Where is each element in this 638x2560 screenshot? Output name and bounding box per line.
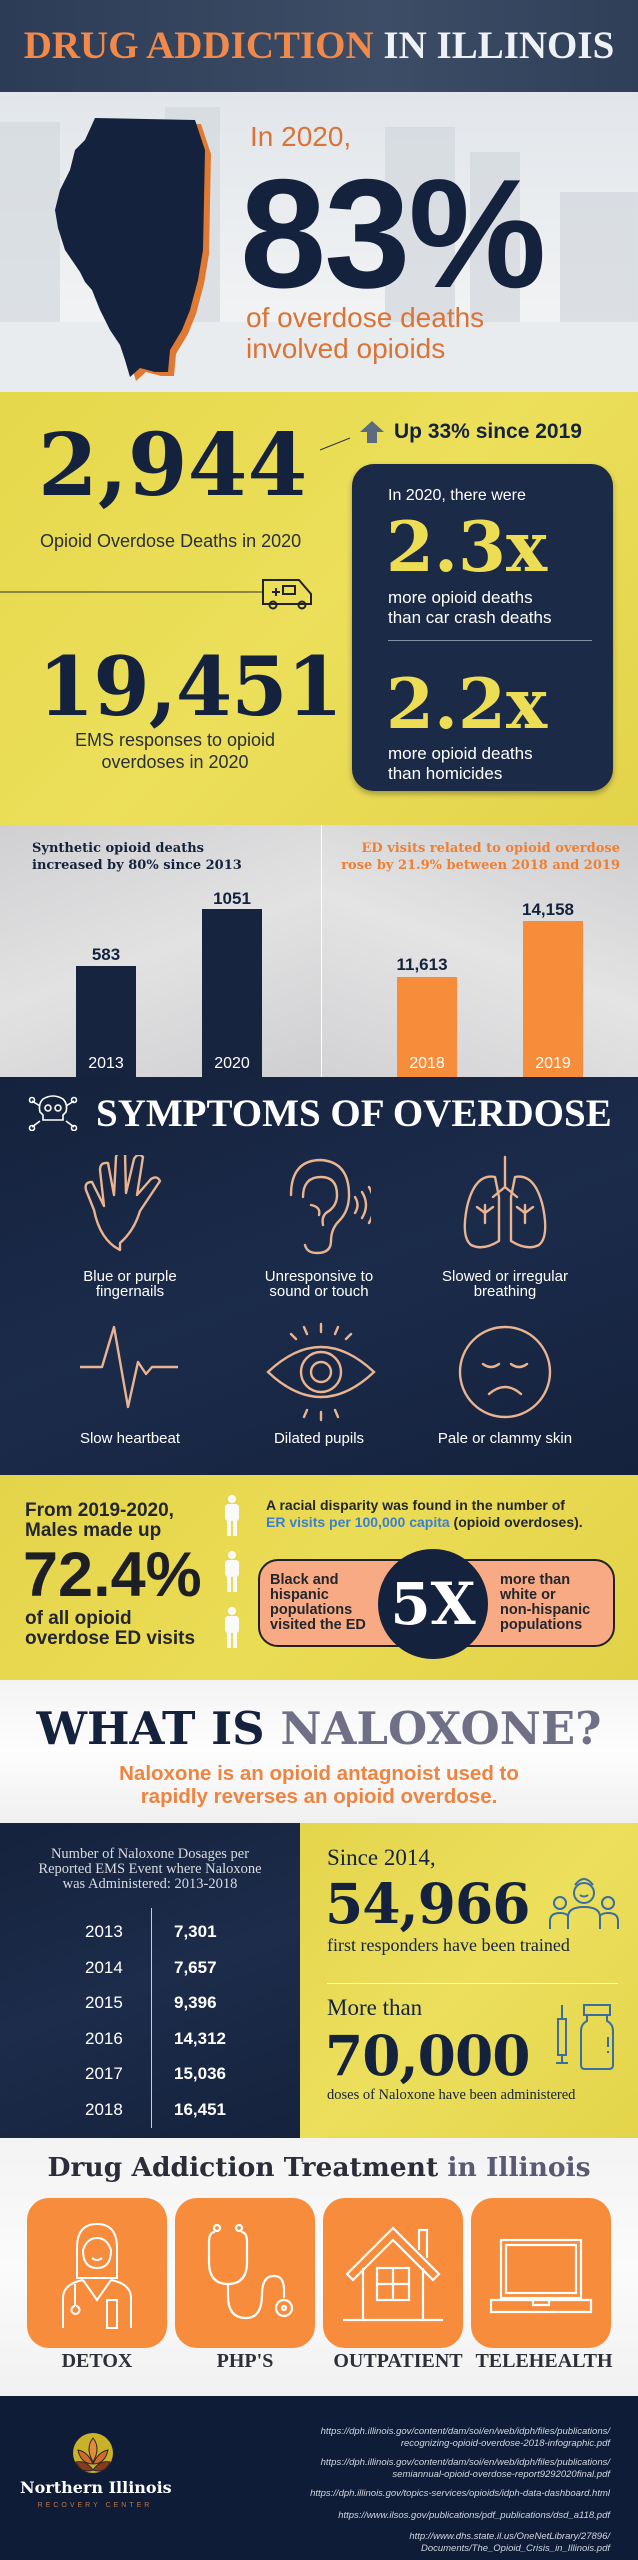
badge: 5X	[378, 1549, 488, 1659]
stat 2,944: 2,944	[38, 415, 307, 516]
panel: hero 83%	[0, 92, 638, 392]
text: car crash: more opioid deaths	[388, 588, 533, 607]
icon: skull	[28, 1095, 78, 1131]
big stat 72.4%: 72.4%	[23, 1540, 202, 1610]
panel: comparison box	[352, 464, 613, 791]
text: definition: rapidly reverses an opioid overdose.	[141, 1785, 497, 1808]
text: from 2019-2020: From 2019-2020,	[25, 1500, 174, 1521]
panel: naloxone dosage table: 2014	[85, 1958, 123, 1977]
label: EMS responses: overdoses in 2020	[101, 752, 249, 772]
symptom: dilated pupils: Dilated pupils	[274, 1430, 364, 1447]
connector line	[320, 438, 350, 450]
callout: 5X box: Black and	[270, 1572, 338, 1588]
callout: 5X box: white or	[500, 1587, 556, 1603]
logo: Northern Illinois	[20, 2478, 172, 2497]
heading: Drug Addiction Treatment in Illinois	[47, 2152, 591, 2183]
panel: treatment	[0, 2138, 638, 2396]
tile: detox	[27, 2198, 167, 2348]
tile: php	[175, 2198, 315, 2348]
text: of overdose deaths: involved opioids	[246, 333, 445, 364]
symptom: breathing: Slowed or irregular	[442, 1268, 568, 1285]
logo	[20, 2433, 172, 2509]
icon: syringe and vial	[556, 2004, 614, 2070]
icon: male figures	[225, 1495, 239, 1648]
symptom: slow heartbeat: Slow heartbeat	[80, 1430, 180, 1447]
icon: responders	[549, 1878, 619, 1929]
bar chart	[396, 900, 583, 1077]
panel: naloxone dosage table: 2016	[85, 2029, 123, 2048]
sources: https://dph.illinois.gov/content/dam/soi/en/web/idph/files/publications/	[321, 2426, 610, 2437]
text: of all opioid: of all opioid	[25, 1608, 132, 1629]
panel: naloxone dosage table: 2015	[85, 1993, 123, 2012]
panel: naloxone dosage table: 7,657	[174, 1958, 217, 1977]
text: of overdose deaths	[246, 302, 484, 364]
panel: male / racial disparity	[0, 1475, 638, 1680]
symptom: fingernails: Blue or purple	[83, 1268, 177, 1285]
text: up 33%: Up 33% since 2019	[394, 420, 582, 443]
panel: naloxone dosage table	[0, 1823, 300, 2138]
icon: ambulance	[263, 580, 311, 608]
bar chart: 1051	[213, 889, 251, 908]
tile: outpatient	[323, 2198, 463, 2348]
panel: ED visits chart	[322, 825, 638, 1077]
footer	[0, 2396, 638, 2560]
text: from 2019-2020	[25, 1500, 174, 1541]
symptom: dilated pupils	[266, 1322, 376, 1447]
logo: RECOVERY CENTER	[38, 2502, 152, 2509]
text: definition: Naloxone is an opioid antagnoist used to	[119, 1762, 519, 1785]
text: racial disparity: ER visits per 100,000 capita (opioid overdoses).	[266, 1514, 583, 1530]
panel: naloxone dosage table: 2018	[85, 2100, 123, 2119]
bar chart: 11,613	[396, 955, 448, 974]
tile labels: TELEHEALTH	[475, 2350, 613, 2372]
chart title: ED visits related to opioid overdose	[361, 841, 620, 856]
table title: was Administered: 2013-2018	[63, 1876, 237, 1892]
chart title: rose by 21.9% between 2018 and 2019	[341, 858, 620, 873]
title: DRUG ADDICTION IN ILLINOIS	[24, 24, 614, 67]
icon: up arrow	[360, 421, 384, 443]
symptom: slow heartbeat	[80, 1326, 180, 1447]
panel: naloxone dosage table: 2013	[85, 1922, 123, 1941]
panel: naloxone dosage table: 16,451	[174, 2100, 226, 2119]
sources: semiannual-opioid-overdose-report9292020final.pdf https://dph.illinois.gov/topics-services/opioids/idph-data-dashboard.html https://www.ilsos.gov/publications/pdf_publications/dsd_a118.pdf http://www.dhs.state.il.us/OneNetLibrary/27896/	[310, 2468, 610, 2542]
bar chart: 583	[92, 945, 120, 964]
symptom: unresponsive	[265, 1158, 373, 1300]
tile: telehealth	[471, 2198, 611, 2348]
table rows	[85, 1922, 226, 2119]
callout: 5X box	[258, 1559, 615, 1647]
panel: naloxone dosage table: 14,312	[174, 2029, 226, 2048]
tile labels	[62, 2350, 613, 2372]
stat 19,451: 19,451	[38, 640, 342, 735]
symptom: breathing	[442, 1156, 568, 1300]
text: homicides: than homicides	[388, 764, 502, 783]
chart title: increased by 80% since 2013	[32, 858, 242, 873]
bar chart: 14,158	[522, 900, 574, 919]
text: of all opioid	[25, 1608, 195, 1649]
sources	[310, 2426, 611, 2554]
text: doses administered: doses of Naloxone have been administered	[327, 2087, 575, 2103]
text: more than: More than	[327, 1995, 422, 2020]
callout: 5X box: populations	[270, 1602, 352, 1618]
callout: 5X box: non-hispanic	[500, 1602, 590, 1618]
table title	[38, 1846, 262, 1892]
symptom: breathing: breathing	[474, 1283, 536, 1300]
text: car crash	[388, 588, 551, 627]
text: first responders: first responders have been trained	[327, 1935, 570, 1955]
panel: naloxone dosage table: 2017	[85, 2064, 123, 2083]
panel: yellow stats	[0, 392, 638, 825]
stat 2.3x: 2.3x	[386, 507, 547, 588]
symptom: pale skin	[438, 1326, 572, 1447]
tile labels: OUTPATIENT	[333, 2350, 463, 2372]
big stat 83%: 83%	[240, 147, 544, 320]
panel: naloxone stats	[300, 1823, 638, 2138]
label: deaths: Opioid Overdose Deaths in 2020	[40, 531, 301, 551]
chart title	[341, 841, 620, 873]
callout: 5X box: visited the ED	[270, 1617, 366, 1633]
text: car crash: than car crash deaths	[388, 608, 551, 627]
icon: Illinois map	[55, 118, 211, 381]
text: since 2014: Since 2014,	[327, 1845, 436, 1870]
stat 2.2x: 2.2x	[386, 664, 547, 745]
stat 54,966: 54,966	[325, 1871, 530, 1936]
tile labels: PHP'S	[217, 2350, 273, 2372]
bar chart: 2018	[409, 1055, 445, 1072]
text: definition	[119, 1762, 519, 1808]
label: EMS responses	[75, 730, 275, 772]
text: from 2019-2020: Males made up	[25, 1520, 161, 1541]
table title: Number of Naloxone Dosages per	[51, 1846, 249, 1862]
bar chart: 2013	[88, 1055, 124, 1072]
panel: what is naloxone	[0, 1680, 638, 1823]
text: of overdose deaths: of overdose deaths	[246, 302, 484, 333]
panel: symptoms of overdose	[0, 1077, 638, 1475]
bar chart	[76, 889, 262, 1077]
callout: 5X box: more than	[500, 1572, 570, 1588]
badge: 5X: 5X	[390, 1570, 476, 1638]
chart title: Synthetic opioid deaths	[32, 841, 204, 856]
symptom: fingernails	[83, 1155, 177, 1300]
panel: naloxone dosage table: 9,396	[174, 1993, 217, 2012]
divider line with ambulance	[0, 579, 312, 610]
text: of all opioid: overdose ED visits	[25, 1628, 195, 1649]
text: homicides: more opioid deaths	[388, 744, 533, 763]
sources: recognizing-opioid-overdose-2018-infographic.pdf https://dph.illinois.gov/content/dam/soi/en/web/idph/files/publications/	[321, 2438, 610, 2468]
heading: SYMPTOMS OF OVERDOSE	[96, 1092, 612, 1135]
text: In 2020: In 2020,	[250, 121, 351, 152]
callout: 5X box: hispanic	[270, 1587, 329, 1603]
label: EMS responses: EMS responses to opioid	[75, 730, 275, 750]
callout: 5X box: populations	[500, 1617, 582, 1633]
sources: Documents/The_Opioid_Crisis_in_Illinois.pdf	[421, 2542, 610, 2554]
chart title	[32, 841, 242, 873]
text: racial disparity: A racial disparity was found in the number of	[266, 1497, 565, 1513]
text: homicides	[388, 744, 533, 783]
tile labels: DETOX	[62, 2350, 132, 2372]
bar chart: 2019	[535, 1055, 571, 1072]
table title: Reported EMS Event where Naloxone	[38, 1861, 262, 1877]
symptom: pale skin: Pale or clammy skin	[438, 1430, 572, 1447]
bar chart: 2020	[214, 1055, 250, 1072]
header band	[0, 0, 638, 92]
heading: WHAT IS NALOXONE?	[36, 1702, 602, 1755]
symptom: fingernails: fingernails	[96, 1283, 164, 1300]
panel: synthetic opioid chart	[0, 825, 321, 1077]
text: racial disparity	[266, 1497, 583, 1530]
panel: naloxone dosage table: 15,036	[174, 2064, 226, 2083]
text: in 2020 there were: In 2020, there were	[388, 487, 526, 504]
symptom: unresponsive: Unresponsive to	[265, 1268, 373, 1285]
stat 70,000: 70,000	[325, 2023, 530, 2088]
panel: naloxone dosage table: 7,301	[174, 1922, 217, 1941]
symptom: unresponsive: sound or touch	[269, 1283, 369, 1300]
